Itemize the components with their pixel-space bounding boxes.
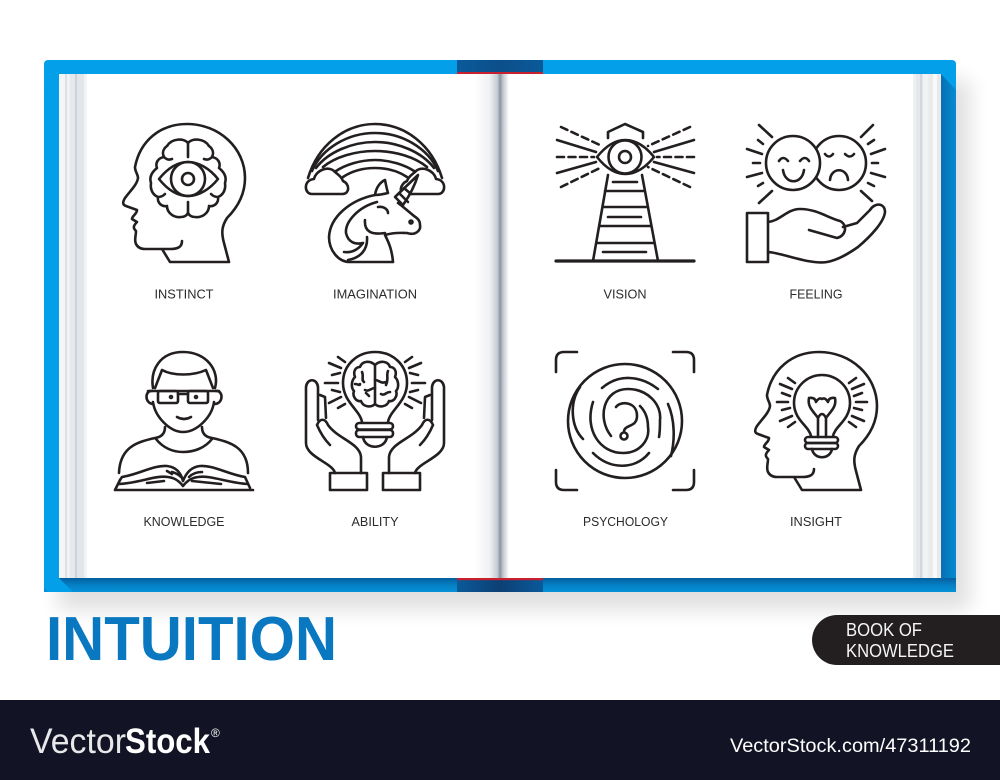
rays	[777, 378, 867, 427]
spine bottom band	[457, 578, 543, 592]
icon: psychology maze	[556, 352, 694, 490]
spine top band	[457, 60, 543, 74]
footer logo	[30, 722, 220, 761]
label: ability: ABILITY	[352, 515, 399, 529]
icon: rainbow and unicorn	[306, 124, 444, 262]
glasses	[148, 391, 219, 403]
label: psychology: PSYCHOLOGY	[583, 515, 669, 529]
spine gutter	[474, 74, 509, 578]
icon: lighthouse eye	[556, 124, 694, 261]
label: vision: VISION	[604, 288, 646, 302]
left page edges	[59, 74, 87, 578]
label: instinct: INSTINCT	[154, 288, 214, 302]
right hand	[383, 380, 444, 490]
brain	[352, 362, 398, 406]
footer logo: Vector	[30, 722, 126, 761]
torso	[119, 427, 248, 473]
book shadow	[58, 80, 970, 610]
open pages	[59, 74, 941, 578]
rays	[325, 357, 425, 408]
icon: ability bulb in hands	[306, 352, 444, 490]
icon: feeling faces in hand	[747, 125, 885, 262]
icon: knowledge reader	[115, 352, 253, 490]
label: insight: INSIGHT	[790, 515, 842, 529]
smiling face	[766, 136, 820, 190]
sad face	[812, 136, 866, 190]
icon: insight head with bulb	[755, 352, 877, 490]
hand	[747, 205, 885, 262]
question mark	[616, 403, 637, 440]
corner brackets	[556, 352, 694, 490]
bulb	[343, 352, 407, 447]
hair and face	[146, 352, 222, 432]
badge: book of knowledge: BOOK OF	[846, 620, 922, 640]
eye	[597, 140, 654, 174]
label: knowledge: KNOWLEDGE	[144, 515, 224, 529]
brain	[150, 140, 226, 217]
left hand	[306, 380, 367, 490]
label: feeling: FEELING	[790, 288, 842, 302]
book cover	[44, 60, 956, 592]
badge: book of knowledge: KNOWLEDGE	[846, 641, 954, 661]
eye	[159, 162, 218, 196]
maze rings	[568, 364, 682, 478]
icon: instinct head	[123, 124, 245, 262]
bulb	[794, 375, 850, 457]
unicorn	[329, 175, 420, 262]
right page edges	[913, 74, 941, 578]
open book	[115, 466, 253, 490]
rainbow arcs	[308, 124, 442, 178]
clouds	[306, 169, 348, 194]
title: INTUITION	[46, 605, 337, 674]
label: imagination: IMAGINATION	[333, 288, 417, 302]
light rays	[557, 127, 694, 187]
footer bar	[0, 700, 1000, 780]
footer logo: ®	[211, 726, 220, 740]
sun rays	[747, 125, 885, 203]
footer logo: Stock	[125, 722, 210, 761]
badge: book of knowledge	[812, 615, 1000, 665]
footer image id: VectorStock.com/47311192	[730, 736, 971, 757]
tower	[593, 175, 658, 261]
